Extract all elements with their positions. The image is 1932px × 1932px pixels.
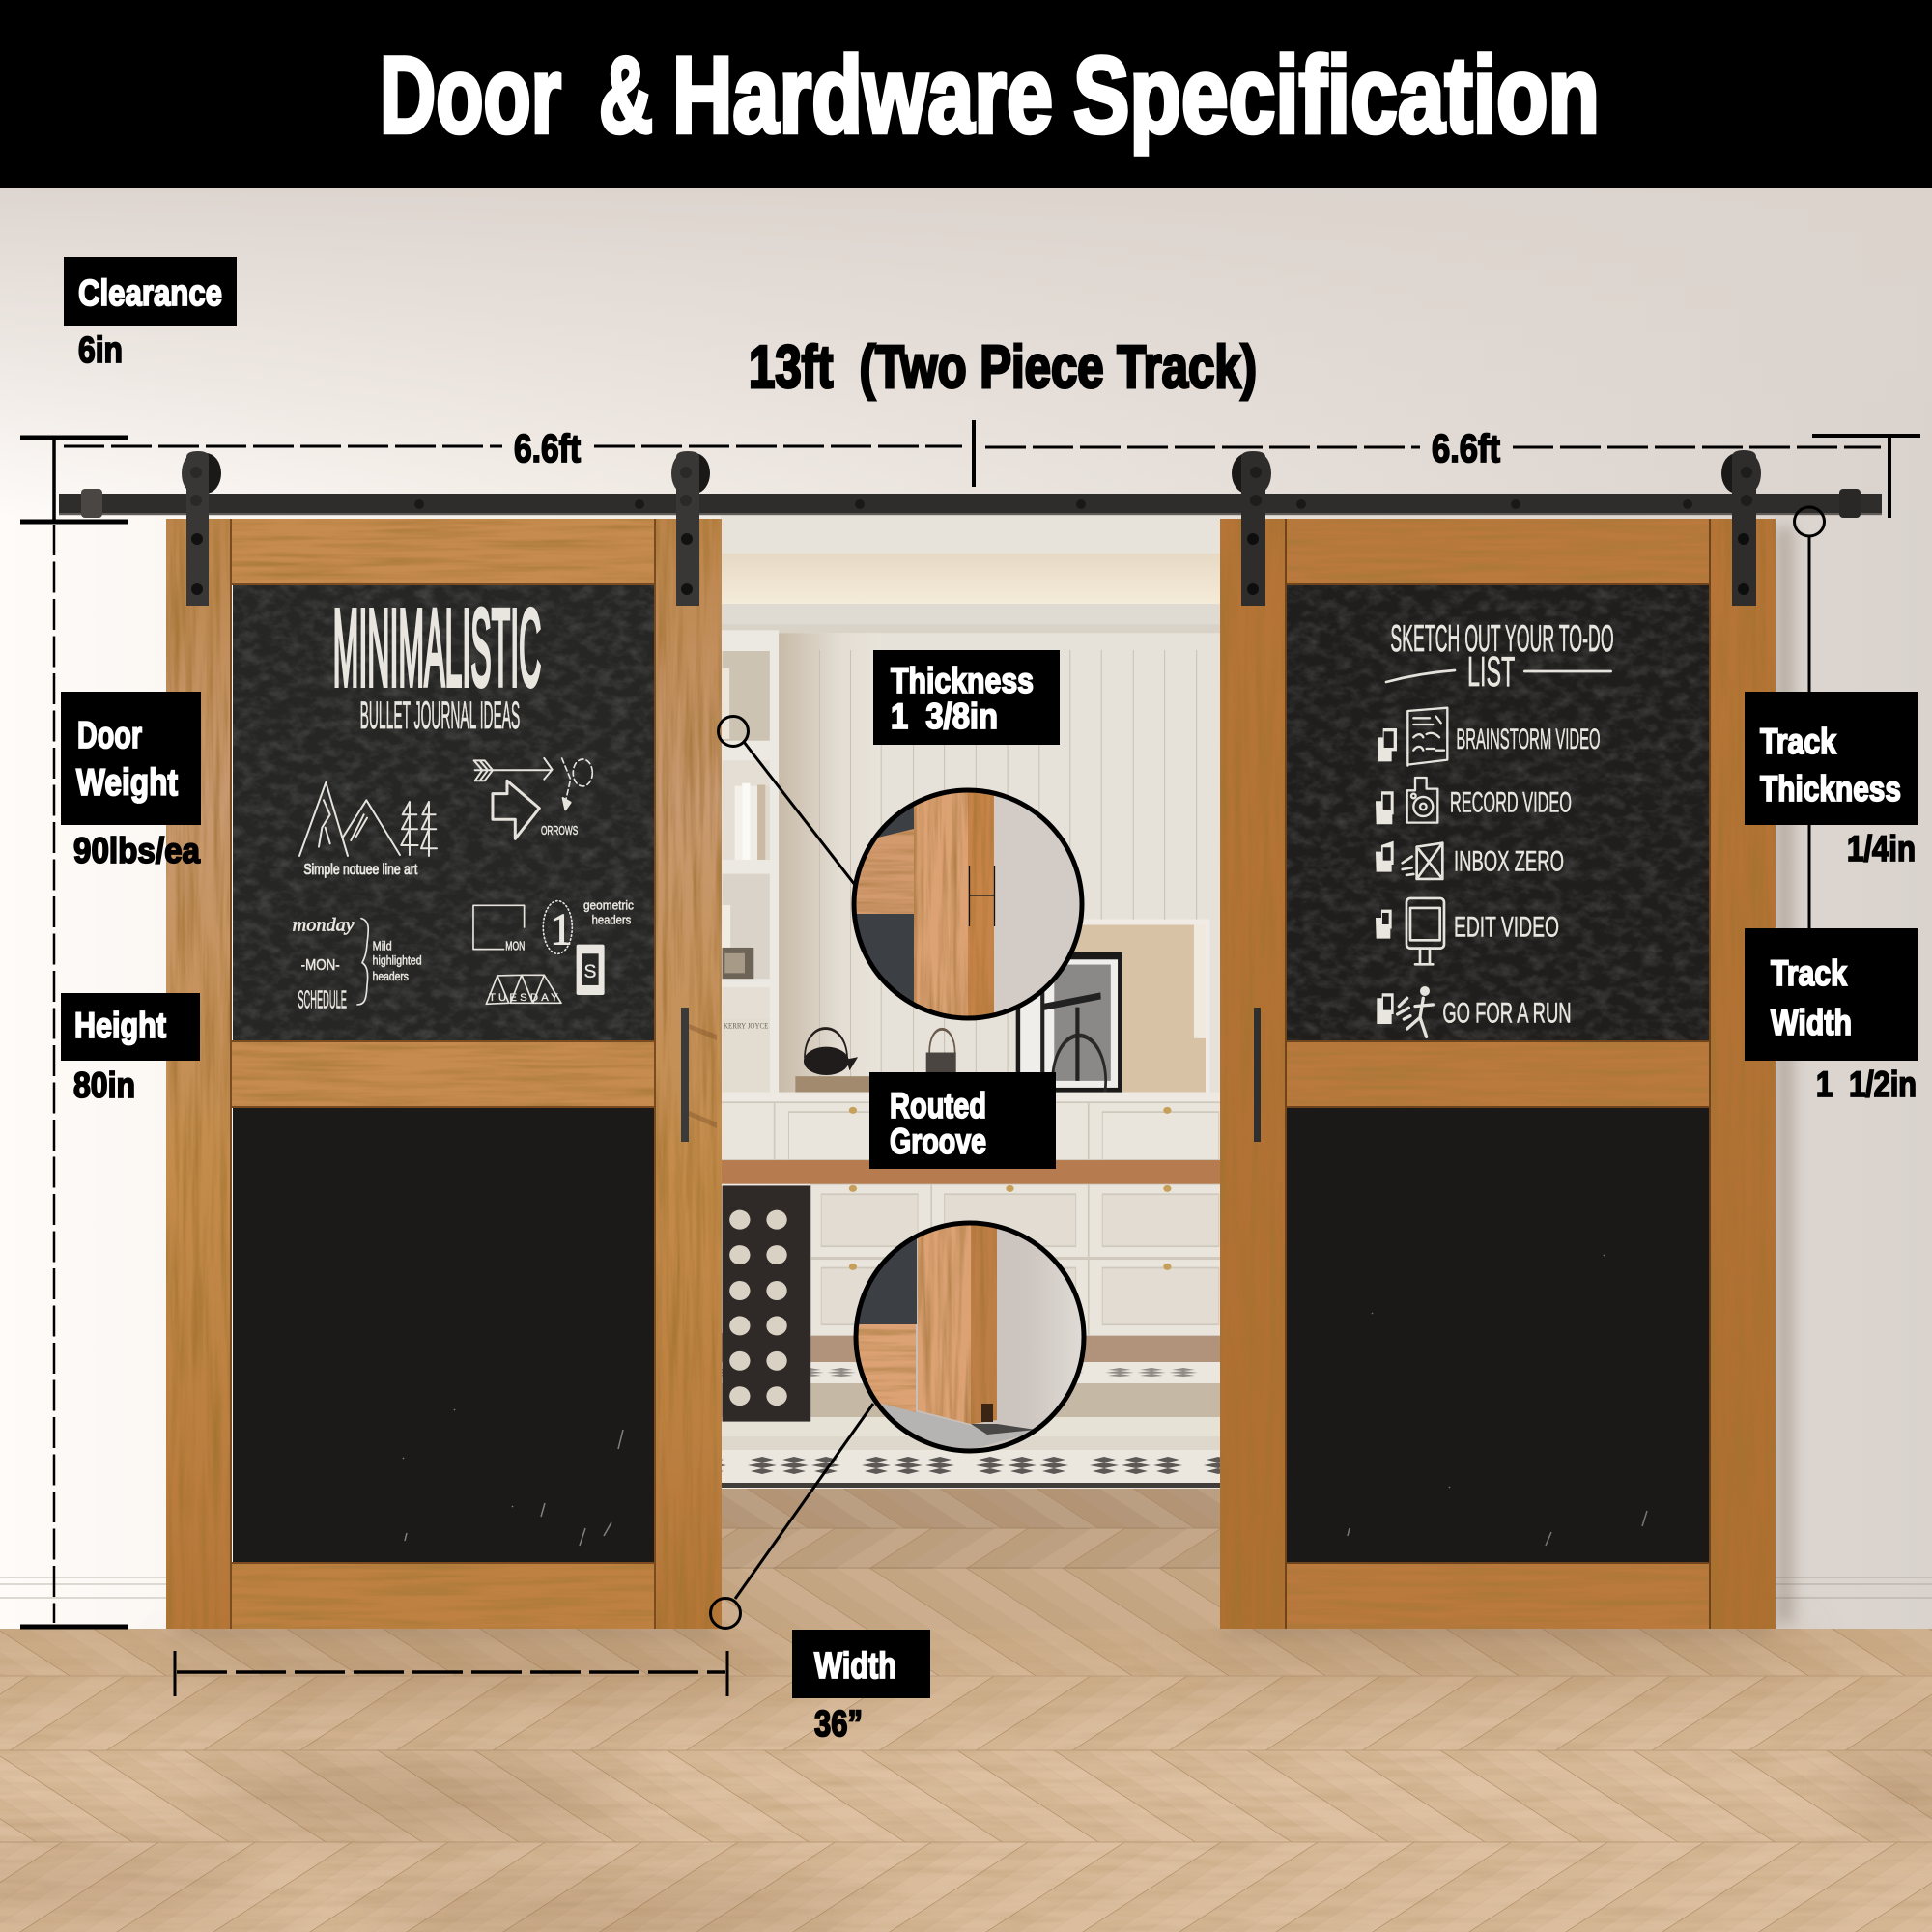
baseboard left bbox=[0, 1577, 166, 1598]
title banner: & bbox=[599, 35, 653, 156]
chalk drawing: minimalistic bullet journal: 1 bbox=[550, 904, 573, 954]
clearance label: Clearance bbox=[78, 273, 222, 314]
track thickness label: Track bbox=[1760, 722, 1836, 761]
interior room seen between the doors bbox=[721, 516, 1220, 1488]
chalk drawing: minimalistic bullet journal: MON bbox=[505, 939, 525, 952]
chalk drawing: minimalistic bullet journal: highlighted bbox=[373, 953, 422, 967]
left barn door: MINIMALISTIC bbox=[333, 586, 541, 709]
book: kerry joyce: KERRY JOYCE bbox=[724, 1021, 769, 1031]
clearance bracket right bbox=[1812, 436, 1920, 518]
hanger left door right bbox=[671, 451, 710, 606]
width label: Width bbox=[814, 1646, 896, 1687]
left lower board chalk scratches bbox=[403, 1409, 623, 1546]
track length heading: 13ft (Two Piece Track) bbox=[749, 334, 1257, 401]
chalk drawing: to-do list: BRAINSTORM VIDEO bbox=[1456, 724, 1601, 755]
small kettle bbox=[926, 1029, 956, 1072]
baseboard right bbox=[1776, 1577, 1932, 1598]
width label: 36” bbox=[814, 1704, 863, 1745]
book: kerry joyce bbox=[724, 1023, 769, 1028]
chalk drawing: minimalistic bullet journal: -MON- bbox=[301, 957, 340, 974]
camera icon bbox=[1407, 778, 1437, 823]
routed groove label: Groove bbox=[890, 1122, 986, 1161]
chalk drawing: minimalistic bullet journal: TUESDAY bbox=[489, 992, 558, 1004]
checkbox icons bbox=[1376, 728, 1397, 1024]
door weight label: Door bbox=[77, 715, 142, 756]
track width label: Track bbox=[1771, 953, 1847, 993]
thickness pointer bbox=[719, 717, 855, 885]
door pull handle right bbox=[1254, 1008, 1261, 1142]
right door rails bbox=[1287, 519, 1709, 1629]
title banner: Door bbox=[380, 35, 561, 156]
brainstorm board icon bbox=[1407, 708, 1447, 766]
right door lower chalkboard bbox=[1287, 1107, 1709, 1563]
title banner: Specification bbox=[1073, 35, 1600, 156]
left door lower chalkboard bbox=[233, 1107, 654, 1563]
framed bicycle photo bbox=[1016, 952, 1122, 1093]
title banner bbox=[0, 0, 1932, 188]
left barn door bbox=[166, 519, 722, 1629]
upper cabinets bbox=[715, 1102, 1236, 1160]
geometric headers bbox=[473, 901, 572, 1004]
height label: 80in bbox=[73, 1065, 135, 1105]
hanger right door left bbox=[1232, 451, 1271, 606]
chalk drawing: to-do list: LIST bbox=[1467, 649, 1515, 696]
wood countertop bbox=[715, 1160, 1236, 1184]
runner icon bbox=[1398, 988, 1433, 1037]
hanger right door right bbox=[1721, 450, 1761, 606]
leaning art bbox=[1067, 920, 1209, 1094]
height label bbox=[61, 993, 200, 1105]
track thickness label: Thickness bbox=[1760, 769, 1901, 809]
right barn door bbox=[1220, 519, 1776, 1629]
height dimension line bbox=[20, 525, 128, 1627]
height label: Height bbox=[74, 1006, 166, 1045]
track stops bbox=[81, 489, 1861, 518]
width label bbox=[792, 1630, 930, 1745]
chalk drawing: to-do list: GO FOR A RUN bbox=[1442, 997, 1572, 1029]
sliding barn door track bbox=[59, 450, 1882, 606]
right lower board chalk scratches bbox=[1348, 1255, 1647, 1546]
track width label: Width bbox=[1771, 1003, 1852, 1042]
chalk drawing: to-do list: RECORD VIDEO bbox=[1450, 787, 1572, 819]
track dimension line: 6.6ft bbox=[1432, 426, 1500, 470]
chalk drawing: minimalistic bullet journal bbox=[293, 586, 634, 1013]
floor planks between doors bbox=[721, 1489, 1221, 1629]
right barn door: SKETCH OUT YOUR TO-DO bbox=[1390, 617, 1614, 660]
track thickness label bbox=[1745, 692, 1918, 868]
chalk drawing: minimalistic bullet journal: ORROWS bbox=[541, 824, 578, 838]
right door stiles bbox=[1220, 519, 1776, 1629]
brass knobs bbox=[849, 1107, 1172, 1270]
chalk drawing: minimalistic bullet journal: S bbox=[584, 962, 596, 982]
wall background bbox=[0, 188, 1932, 1633]
hanger left door left bbox=[182, 451, 221, 606]
door weight label bbox=[61, 692, 201, 870]
mountains and trees bbox=[299, 782, 437, 856]
track dimension line bbox=[64, 420, 1881, 487]
track callout connector bbox=[1795, 507, 1824, 929]
left door upper chalkboard bbox=[233, 585, 654, 1041]
left door stiles bbox=[166, 519, 722, 1629]
left door rails bbox=[232, 519, 655, 1629]
track dimension line: 6.6ft bbox=[514, 426, 581, 470]
clearance bracket left bbox=[20, 438, 128, 522]
lower cabinets bbox=[810, 1184, 1236, 1336]
chalk drawing: to-do list bbox=[1376, 617, 1614, 1037]
chalk drawing: to-do list: EDIT VIDEO bbox=[1454, 911, 1559, 943]
bookshelf bbox=[722, 630, 779, 1097]
floor between doors bbox=[722, 1333, 723, 1336]
thickness label bbox=[873, 650, 1060, 745]
right door upper chalkboard bbox=[1287, 585, 1709, 1041]
callout: routed groove magnifier bbox=[711, 1223, 1084, 1629]
chalk drawing: minimalistic bullet journal: headers bbox=[373, 970, 409, 983]
track thickness label: 1/4in bbox=[1847, 829, 1916, 868]
thickness label: 1 3/8in bbox=[891, 696, 998, 736]
door width dimension line bbox=[175, 1651, 727, 1696]
title banner: Hardware bbox=[672, 35, 1053, 156]
patterned rug bbox=[721, 1362, 1221, 1489]
door weight label: 90lbs/ea bbox=[73, 831, 200, 870]
track bolts bbox=[414, 499, 1692, 509]
chalk drawing: minimalistic bullet journal: headers bbox=[592, 913, 632, 927]
chalk drawing: minimalistic bullet journal: SCHEDULE bbox=[298, 984, 347, 1013]
routed groove label bbox=[869, 1072, 1056, 1169]
chalk drawing: minimalistic bullet journal: Mild bbox=[373, 939, 392, 952]
chalk drawing: minimalistic bullet journal: geometric bbox=[583, 898, 634, 913]
callout: door thickness magnifier bbox=[719, 717, 1082, 1018]
chalk drawing: minimalistic bullet journal: Simple notuee line art bbox=[303, 862, 418, 878]
clearance label bbox=[64, 257, 237, 371]
chalk drawing: minimalistic bullet journal: BULLET JOURNAL IDEAS bbox=[360, 695, 520, 737]
clearance label: 6in bbox=[78, 330, 123, 371]
perforated black stand bbox=[723, 1185, 810, 1422]
routed groove label: Routed bbox=[890, 1086, 986, 1125]
monitor icon bbox=[1406, 898, 1444, 964]
floor shadows bbox=[0, 1625, 1932, 1932]
herringbone wood floor bbox=[0, 1625, 1932, 1932]
cast iron teapot bbox=[795, 1029, 872, 1093]
door cast shadows bbox=[174, 526, 1793, 1634]
chalk drawing: to-do list: INBOX ZERO bbox=[1454, 846, 1564, 878]
arrows bbox=[474, 758, 592, 838]
door pull handle left bbox=[681, 1008, 717, 1142]
groove pointer bbox=[711, 1404, 873, 1629]
thickness label: Thickness bbox=[891, 661, 1034, 700]
track width label bbox=[1745, 928, 1918, 1104]
door weight label: Weight bbox=[76, 762, 178, 804]
envelope icon bbox=[1403, 843, 1442, 879]
shelving, panelling and cabinets bbox=[715, 624, 1236, 1370]
chalk drawing: minimalistic bullet journal: monday bbox=[293, 915, 355, 935]
